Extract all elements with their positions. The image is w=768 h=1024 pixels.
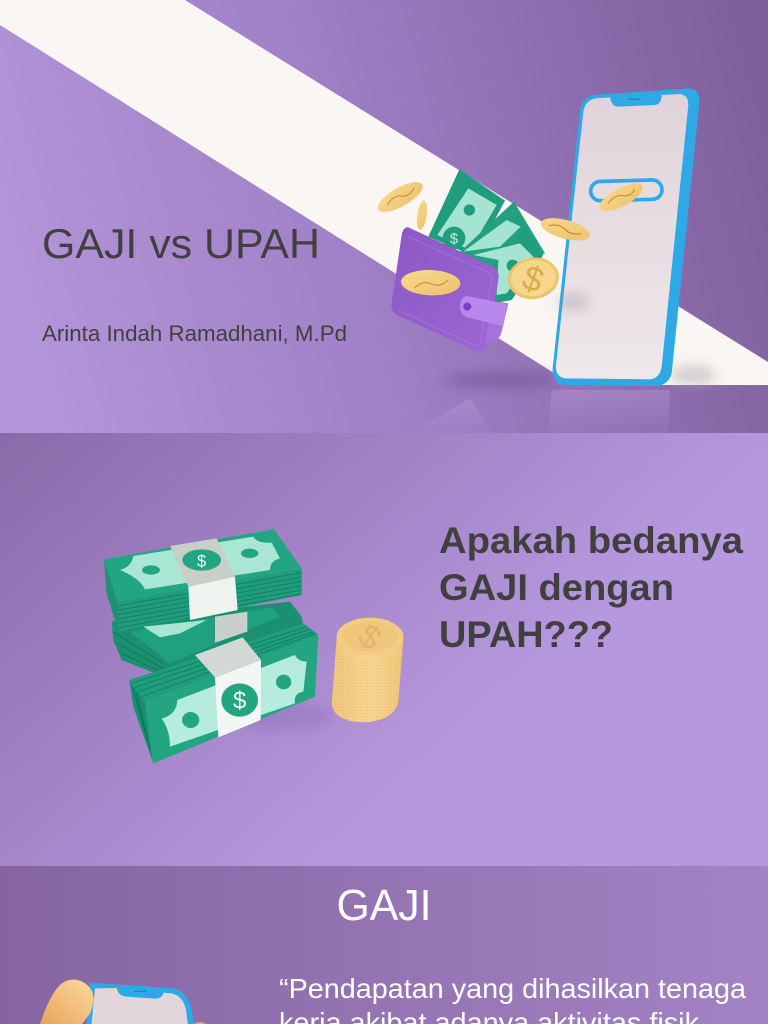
- slide 1 background: [0, 0, 768, 433]
- diagonal white band: [0, 0, 768, 385]
- illustration: money stacks and coins: [104, 529, 403, 763]
- reflection on the floor: [442, 390, 670, 418]
- shadow beside phone on white band: [670, 366, 717, 384]
- heading: question: [439, 520, 743, 655]
- paper band: [170, 538, 235, 587]
- coin stack: $: [351, 617, 388, 658]
- heading: GAJI: GAJI: [336, 881, 432, 930]
- icon: banknote front: [474, 243, 544, 302]
- slide 3 background: [0, 866, 768, 1024]
- heading: question: GAJI dengan: [439, 567, 674, 608]
- floor shadow: [443, 373, 557, 387]
- definition quote: “Pendapatan yang dihasilkan tenaga: [279, 973, 746, 1004]
- author name: Arinta Indah Ramadhani, M.Pd: [42, 321, 347, 346]
- heading: question: Apakah bedanya: [439, 520, 743, 561]
- icon: banknote middle: [458, 202, 545, 267]
- paper band: [195, 637, 261, 677]
- finger: [40, 980, 94, 1024]
- icon: purple wallet: [391, 227, 508, 351]
- heading: question: UPAH???: [439, 614, 613, 655]
- thumb edge: [194, 1022, 206, 1024]
- bottom money stack: $: [233, 688, 246, 715]
- phone body: [85, 983, 197, 1024]
- icon: coin edge-on: [416, 200, 428, 230]
- icon: phone pill slot: [590, 180, 662, 201]
- shadow under stacks: [233, 703, 333, 730]
- icon: flat coin near phone: [540, 218, 590, 240]
- illustration: phone and wallet: [374, 88, 717, 433]
- icon: smartphone: [553, 88, 699, 386]
- definition quote: [279, 973, 746, 1024]
- phone screen: [90, 988, 190, 1024]
- phone speaker: [134, 991, 147, 992]
- middle money stack: [112, 602, 303, 677]
- icon: banknote back: $: [450, 231, 458, 247]
- icon: large coin: [508, 258, 559, 300]
- bottom money stack: [129, 623, 318, 763]
- title: GAJI vs UPAH: GAJI vs UPAH: [42, 220, 320, 267]
- top money stack: $: [197, 552, 206, 571]
- slide 2 background: [0, 433, 768, 866]
- coin stack: [332, 617, 403, 722]
- top money stack: [104, 529, 302, 632]
- icon: large coin: $: [517, 258, 548, 301]
- icon: coin top left: [378, 182, 423, 212]
- illustration: hand holding phone: [40, 980, 207, 1024]
- icon: coin in phone slot: [599, 184, 643, 212]
- icon: banknote back: [428, 169, 505, 257]
- icon: coin on wallet: [401, 269, 461, 296]
